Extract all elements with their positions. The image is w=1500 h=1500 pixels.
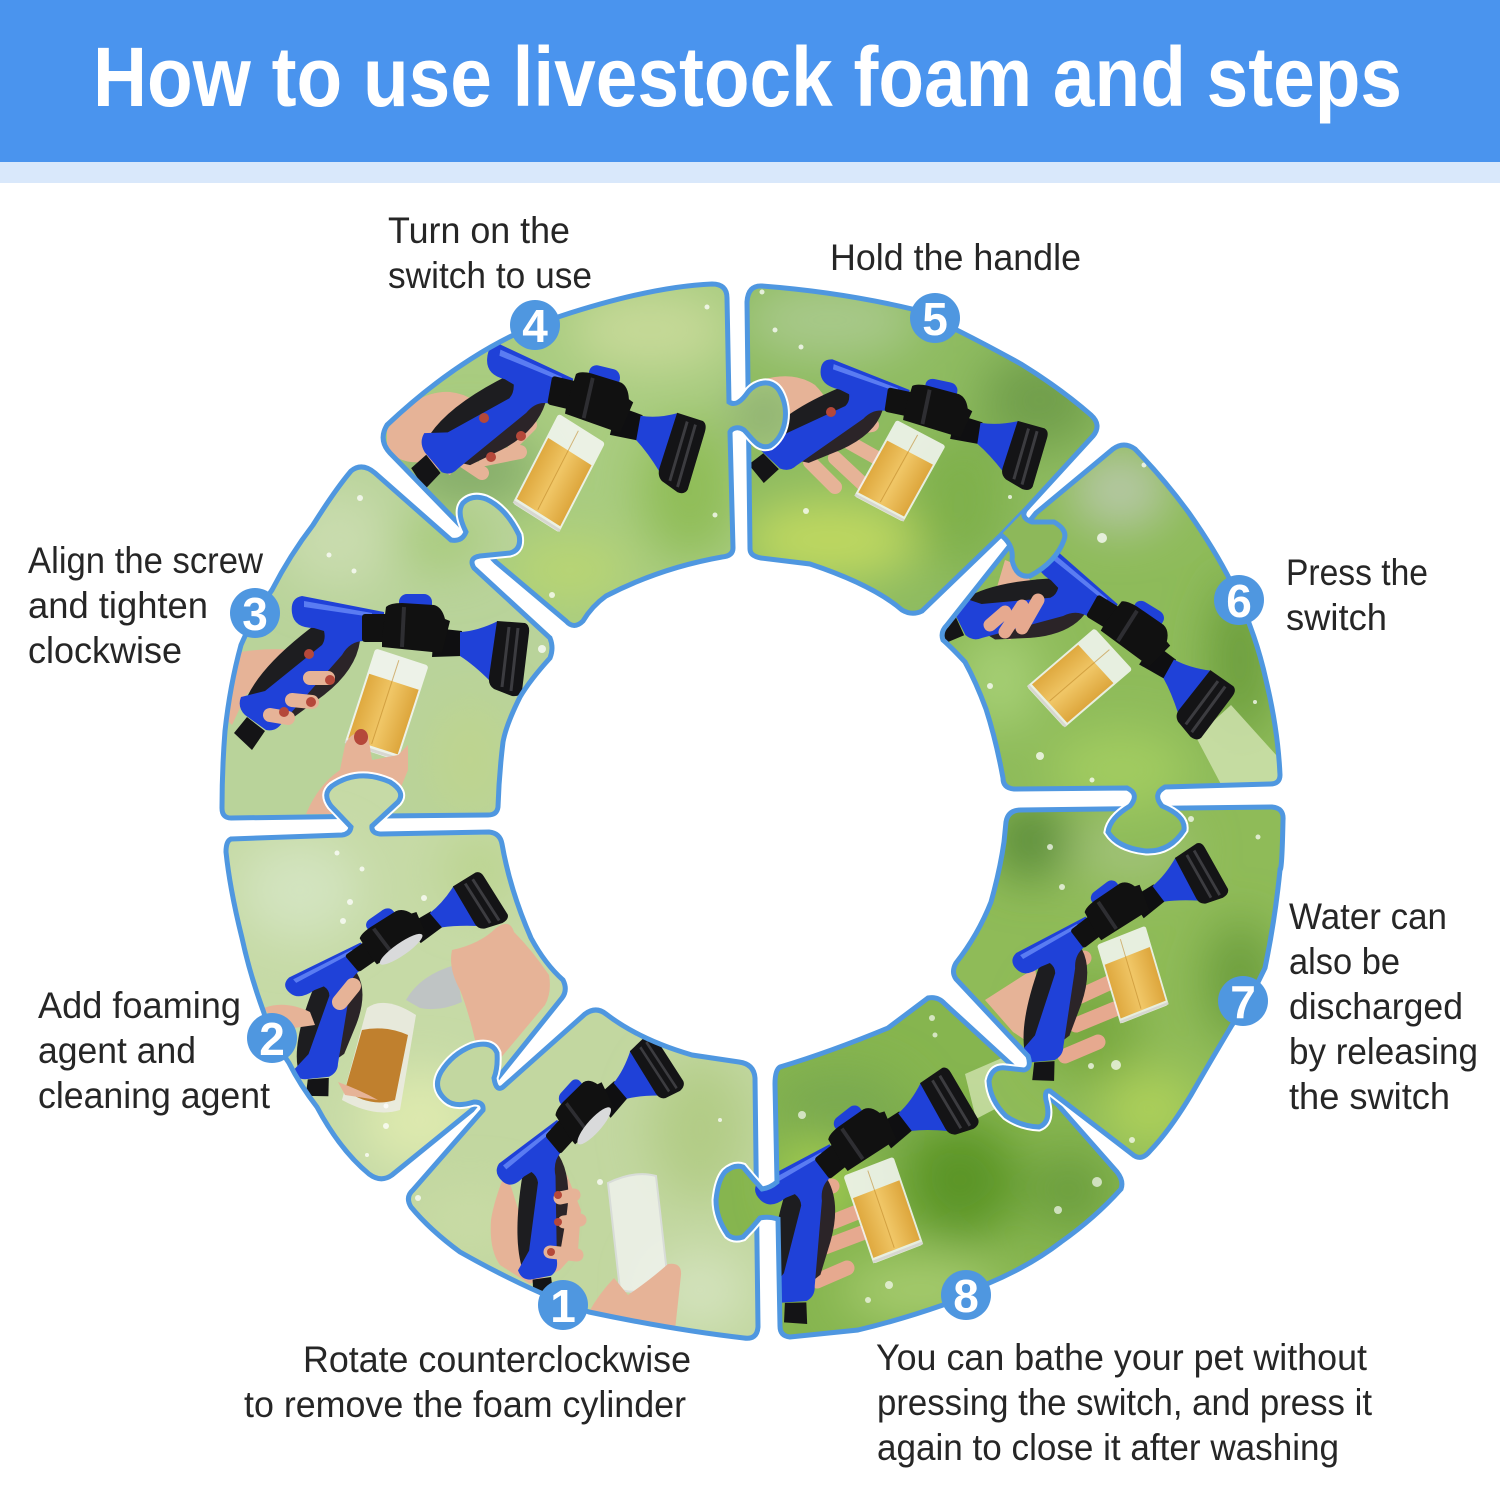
bubble dots xyxy=(415,1118,722,1201)
badge 3 xyxy=(230,588,280,640)
caption step 8: pressing the switch, and press it xyxy=(877,1382,1373,1423)
caption step 7: Water can xyxy=(1289,896,1447,937)
hand and gun, step 6 xyxy=(944,554,1235,740)
caption step 8 xyxy=(876,1337,1373,1468)
panel 5 puzzle tab over panel 6 xyxy=(1001,507,1065,576)
caption step 7: the switch xyxy=(1289,1076,1450,1117)
bubble dots xyxy=(1047,816,1260,1143)
bubble dots xyxy=(798,1015,1102,1303)
bubble dots xyxy=(760,290,1012,514)
caption step 6 xyxy=(1286,552,1428,638)
badge 2 xyxy=(247,1013,297,1065)
hand and gun, step 7 xyxy=(985,843,1228,1081)
hand and gun, step 4 xyxy=(387,344,706,532)
water spray, step 6 xyxy=(1196,705,1278,790)
badge 4: 4 xyxy=(522,300,548,352)
badge 3: 3 xyxy=(242,588,268,640)
caption step 4: Turn on the xyxy=(388,210,570,251)
badge 6 xyxy=(1214,575,1264,627)
badge 6: 6 xyxy=(1226,575,1252,627)
panel 4: turn on the switch xyxy=(380,280,795,630)
caption step 7: also be xyxy=(1289,941,1400,982)
caption step 3: clockwise xyxy=(28,630,182,671)
panel 2: add foaming agent xyxy=(220,770,570,1185)
panel 1: rotate to remove cylinder xyxy=(400,1000,765,1345)
bubble dots xyxy=(326,495,546,653)
hand and gun, step 8 xyxy=(755,1068,979,1324)
badge 1 xyxy=(538,1280,588,1332)
bubble dots xyxy=(987,462,1257,782)
caption step 4 xyxy=(388,210,592,296)
caption step 2: agent and xyxy=(38,1030,196,1071)
hand and gun, step 5 xyxy=(751,359,1048,522)
caption step 8: You can bathe your pet without xyxy=(876,1337,1368,1378)
caption step 3: Align the screw xyxy=(28,540,263,581)
hands, gun, jar and bottle, step 2 xyxy=(265,872,550,1112)
badge 1: 1 xyxy=(550,1280,576,1332)
caption step 1 xyxy=(244,1339,691,1425)
caption step 8: again to close it after washing xyxy=(877,1427,1339,1468)
panel 5: hold the handle xyxy=(740,280,1110,620)
caption step 5: Hold the handle xyxy=(830,237,1081,278)
caption step 6: Press the xyxy=(1286,552,1428,593)
panel 7: release the switch xyxy=(945,800,1290,1165)
badge 7: 7 xyxy=(1230,976,1256,1028)
bubble dots xyxy=(334,850,427,1157)
header band xyxy=(0,0,1500,183)
hand, gun and empty cylinder, step 1 xyxy=(490,1039,684,1326)
badge 2: 2 xyxy=(259,1013,285,1065)
badge 8 xyxy=(941,1270,991,1322)
hands and gun, step 3 xyxy=(222,594,529,814)
badge 4 xyxy=(510,300,560,352)
badge 5: 5 xyxy=(922,293,948,345)
caption step 3: and tighten xyxy=(28,585,208,626)
bubble dots xyxy=(549,290,718,598)
panel 3: align the screw xyxy=(215,460,560,825)
caption step 7: by releasing xyxy=(1289,1031,1478,1072)
caption step 3 xyxy=(28,540,263,671)
caption step 1: to remove the foam cylinder xyxy=(244,1384,686,1425)
badge 7 xyxy=(1218,976,1268,1028)
badge 8: 8 xyxy=(953,1270,979,1322)
caption step 2: Add foaming xyxy=(38,985,241,1026)
caption step 7: discharged xyxy=(1289,986,1463,1027)
caption step 2: cleaning agent xyxy=(38,1075,271,1116)
caption step 2 xyxy=(38,985,271,1116)
panel 6: press the switch xyxy=(929,440,1285,860)
caption step 4: switch to use xyxy=(388,255,592,296)
caption step 1: Rotate counterclockwise xyxy=(303,1339,691,1380)
caption step 6: switch xyxy=(1286,597,1387,638)
panel 8: bathe your pet xyxy=(706,990,1130,1345)
badge 5 xyxy=(910,293,960,345)
caption step 7 xyxy=(1289,896,1478,1117)
water spray, step 8 xyxy=(965,1058,1006,1118)
